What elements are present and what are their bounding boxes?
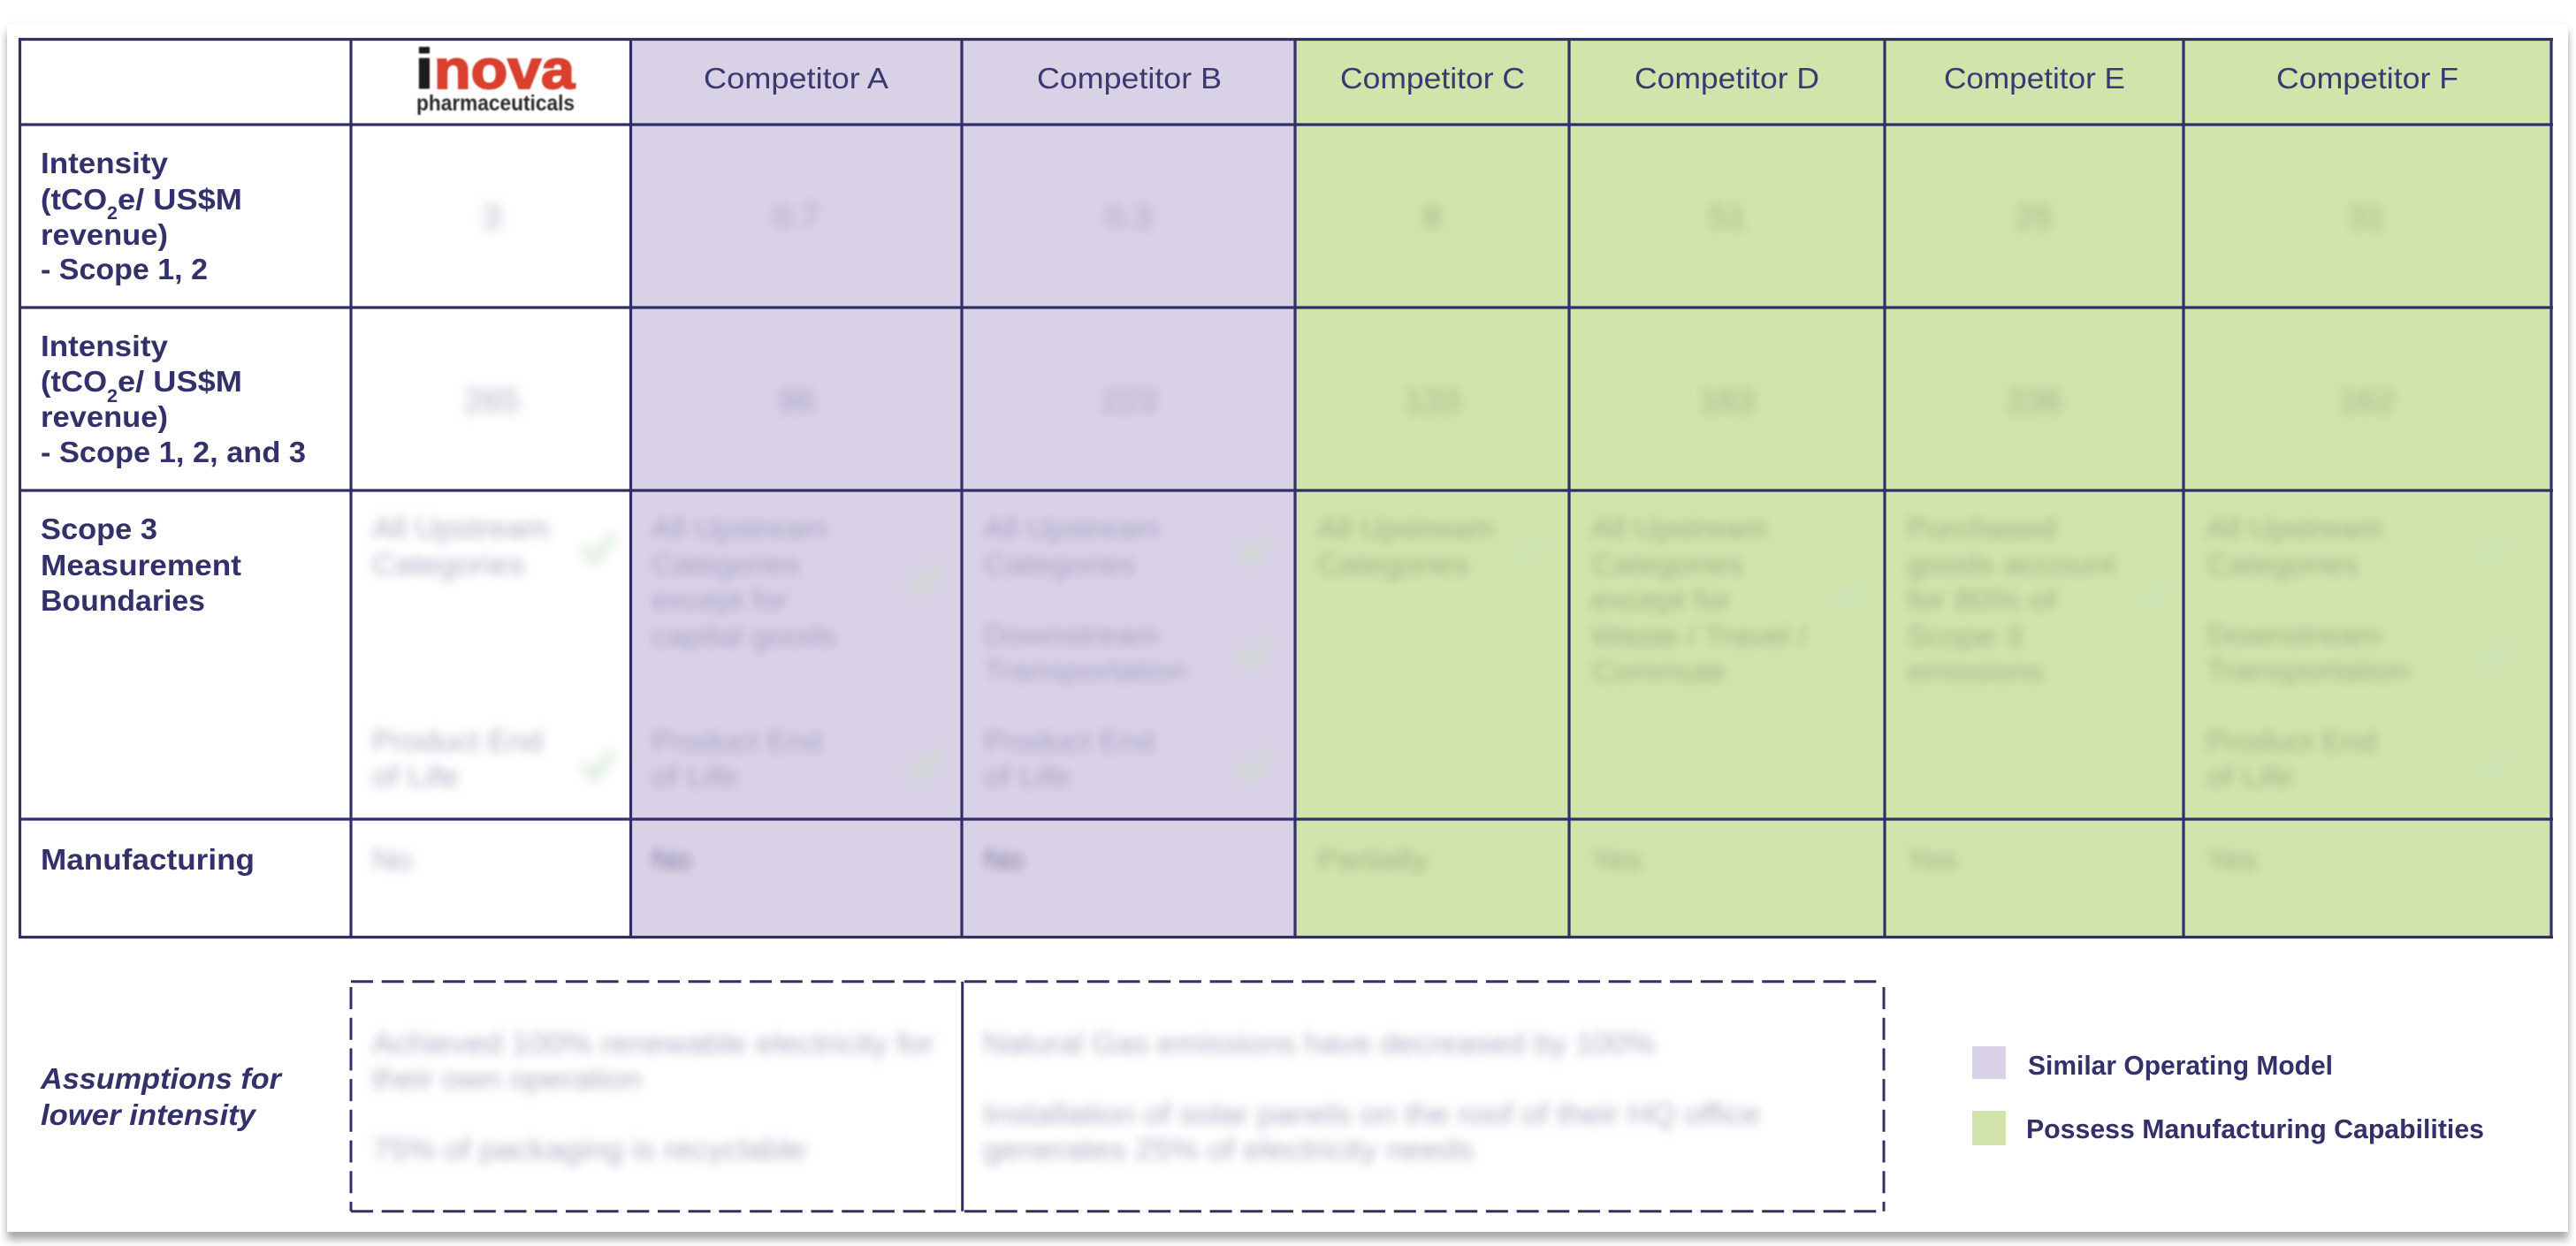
blurred text: competitor B scope 3 boundaries: Product End	[984, 725, 1155, 757]
row label: intensity scope 1, 2, and 3: e/ US$M	[118, 365, 242, 398]
blurred values: manufacturing: No	[372, 843, 412, 876]
row label: manufacturing: Manufacturing	[41, 843, 255, 876]
dashed assumptions box	[351, 982, 1884, 1212]
blurred values: intensity scope 1, 2, and 3: 265	[463, 383, 520, 420]
blurred text: inova scope 3 boundaries: All Upstream	[372, 512, 549, 544]
blurred text: competitor A scope 3 boundaries: capital goods	[652, 619, 837, 652]
blurred text: competitor D scope 3 boundaries: Waste / Travel /	[1591, 619, 1808, 652]
blurred values: intensity scope 1, 2, and 3: 223	[1101, 383, 1157, 420]
blurred text: competitor D scope 3 boundaries	[1591, 512, 1808, 688]
blurred text: competitor B scope 3 boundaries	[984, 512, 1187, 793]
blurred values: intensity scope 1, 2: 51	[1709, 199, 1746, 236]
row label: scope 3 measurement boundaries: Scope 3	[41, 513, 157, 545]
blurred text: inova assumptions: their own operation	[372, 1062, 642, 1095]
blurred text: competitor assumptions: generates 25% of electricity needs	[983, 1133, 1474, 1166]
logo: inova pharmaceuticals: pharmaceuticals	[416, 91, 575, 116]
row label: scope 3 measurement boundaries: Measurement	[41, 549, 241, 581]
blurred text: competitor C scope 3 boundaries: All Upstream	[1317, 512, 1494, 544]
column headers: Competitor A	[704, 62, 888, 95]
row label: scope 3 measurement boundaries: Boundaries	[41, 584, 205, 617]
logo: inova pharmaceuticals: nova	[434, 40, 575, 101]
panel: manufacturing capabilities column background	[1295, 39, 2551, 937]
legend label: similar operating model: Similar Operating Model	[2028, 1050, 2333, 1081]
row label: intensity scope 1, 2, and 3: - Scope 1, 2, and 3	[41, 436, 306, 468]
blurred text: inova assumptions: 75% of packaging is recyclable	[372, 1133, 806, 1166]
blurred values: intensity scope 1, 2: 25	[2016, 199, 2053, 236]
blurred text: inova scope 3 boundaries: Categories	[372, 548, 524, 581]
blurred text: competitor F scope 3 boundaries: Downstream	[2206, 619, 2382, 651]
blurred text: competitor E scope 3 boundaries: emissions	[1907, 655, 2044, 688]
row label: intensity scope 1, 2	[41, 147, 242, 285]
panel: similar operating model column background	[630, 39, 1295, 937]
blurred text: inova scope 3 boundaries: of Life	[372, 760, 459, 793]
row label: intensity scope 1, 2, and 3: Intensity	[41, 330, 169, 362]
column headers: Competitor E	[1944, 62, 2125, 95]
blurred text: competitor F scope 3 boundaries: Categories	[2206, 548, 2359, 581]
blurred text: competitor B scope 3 boundaries: Transportation	[984, 654, 1187, 687]
blurred text: competitor F scope 3 boundaries: All Upstream	[2206, 512, 2383, 544]
blurred text: competitor B scope 3 boundaries: All Upstream	[984, 512, 1161, 544]
row label: intensity scope 1, 2, and 3: revenue)	[41, 400, 168, 433]
blurred text: competitor B scope 3 boundaries: Categories	[984, 548, 1136, 581]
blurred text: competitor assumptions: Installation of solar panels on the roof of their HQ office	[983, 1098, 1760, 1130]
blurred text: competitor A scope 3 boundaries: except for	[652, 583, 788, 616]
column headers: Competitor B	[1037, 62, 1222, 95]
logo: inova pharmaceuticals	[415, 37, 575, 116]
blurred text: competitor A scope 3 boundaries: Categories	[652, 548, 800, 581]
row label: intensity scope 1, 2, and 3: 2	[107, 386, 118, 406]
row label: intensity scope 1, 2, and 3: (tCO	[41, 365, 107, 398]
blurred text: competitor F scope 3 boundaries: of Life	[2206, 760, 2293, 793]
table grid	[19, 38, 2553, 938]
row label: intensity scope 1, 2, and 3	[41, 330, 306, 468]
blurred text: competitor E scope 3 boundaries: Purchased	[1907, 512, 2056, 544]
blurred values: intensity scope 1, 2, and 3: 163	[1699, 383, 1756, 420]
blurred text: inova scope 3 boundaries: Product End	[372, 725, 543, 757]
column headers: Competitor C	[1340, 62, 1525, 95]
row label: intensity scope 1, 2: 2	[107, 203, 118, 224]
legend swatch: similar operating model	[1972, 1046, 2006, 1079]
blurred text: inova assumptions: Achieved 100% renewable electricity for	[372, 1027, 934, 1060]
blurred values: intensity scope 1, 2, and 3: 133	[1404, 383, 1460, 420]
blurred text: competitor B scope 3 boundaries: Downstream	[984, 619, 1159, 651]
blurred text: competitor assumptions	[983, 1027, 1760, 1166]
blurred values: intensity scope 1, 2: 0.7	[774, 199, 819, 236]
legend swatch: possess manufacturing capabilities	[1972, 1111, 2006, 1145]
row label: intensity scope 1, 2: - Scope 1, 2	[41, 253, 208, 285]
blurred values: intensity scope 1, 2	[482, 199, 2385, 236]
row label: intensity scope 1, 2: revenue)	[41, 218, 168, 251]
column headers: Competitor F	[2276, 62, 2458, 95]
blurred text: competitor D scope 3 boundaries: Categories	[1591, 548, 1743, 581]
blurred values: manufacturing: Yes	[2206, 843, 2257, 876]
blurred values: manufacturing: No	[984, 843, 1024, 876]
blurred text: inova scope 3 boundaries	[372, 512, 549, 793]
icon: blurred check marks	[585, 537, 2507, 777]
blurred values: intensity scope 1, 2: 31	[2348, 199, 2385, 236]
blurred text: competitor D scope 3 boundaries: except for	[1591, 583, 1731, 616]
blurred text: competitor A scope 3 boundaries	[652, 512, 837, 793]
blurred text: competitor E scope 3 boundaries: Scope 3	[1907, 619, 2023, 652]
blurred text: competitor assumptions: Natural Gas emissions have decreased by 100%	[983, 1027, 1655, 1060]
row label: intensity scope 1, 2: (tCO	[41, 183, 107, 216]
blurred text: competitor F scope 3 boundaries: Transportation	[2206, 654, 2410, 687]
heading: assumptions for lower intensity	[40, 1062, 283, 1131]
blurred text: competitor C scope 3 boundaries: Categories	[1317, 548, 1469, 581]
blurred text: competitor E scope 3 boundaries	[1907, 512, 2115, 688]
legend	[1972, 1046, 2484, 1145]
row label: intensity scope 1, 2: e/ US$M	[118, 183, 242, 216]
blurred values: manufacturing	[372, 843, 2257, 876]
blurred values: manufacturing: Yes	[1907, 843, 1957, 876]
row label: scope 3 measurement boundaries	[41, 513, 241, 617]
blurred text: competitor A scope 3 boundaries: of Life	[652, 760, 738, 793]
blurred values: manufacturing: Partially	[1317, 843, 1429, 876]
blurred text: competitor F scope 3 boundaries	[2206, 512, 2410, 793]
blurred text: competitor A scope 3 boundaries: All Upstream	[652, 512, 828, 544]
heading: assumptions for lower intensity: lower intensity	[41, 1098, 257, 1131]
heading: assumptions for lower intensity: Assumptions for	[40, 1062, 283, 1095]
blurred text: inova assumptions	[372, 1027, 934, 1166]
blurred text: competitor E scope 3 boundaries: for 80% of	[1907, 583, 2057, 616]
blurred text: competitor B scope 3 boundaries: of Life	[984, 760, 1071, 793]
blurred values: intensity scope 1, 2: 8	[1422, 199, 1442, 236]
blurred text: competitor C scope 3 boundaries	[1317, 512, 1494, 581]
legend label: possess manufacturing capabilities: Possess Manufacturing Capabilities	[2026, 1113, 2484, 1144]
blurred text: competitor A scope 3 boundaries: Product End	[652, 725, 822, 757]
blurred values: intensity scope 1, 2, and 3	[463, 383, 2395, 420]
blurred values: manufacturing: Yes	[1591, 843, 1642, 876]
blurred values: intensity scope 1, 2, and 3: 162	[2338, 383, 2395, 420]
blurred values: intensity scope 1, 2, and 3: 236	[2006, 383, 2062, 420]
blurred text: competitor F scope 3 boundaries: Product End	[2206, 725, 2377, 757]
blurred values: intensity scope 1, 2: 3	[482, 199, 501, 236]
blurred values: intensity scope 1, 2, and 3: 96	[778, 383, 815, 420]
blurred text: competitor E scope 3 boundaries: goods account	[1907, 548, 2115, 581]
blurred values: intensity scope 1, 2: 0.3	[1106, 199, 1152, 236]
blurred text: competitor D scope 3 boundaries: Commute	[1591, 655, 1726, 688]
column headers: Competitor D	[1635, 62, 1819, 95]
column headers	[704, 62, 2458, 95]
blurred text: competitor D scope 3 boundaries: All Upstream	[1591, 512, 1768, 544]
logo: inova pharmaceuticals: i	[415, 37, 434, 101]
blurred values: manufacturing: No	[652, 843, 691, 876]
row label: intensity scope 1, 2: Intensity	[41, 147, 169, 179]
